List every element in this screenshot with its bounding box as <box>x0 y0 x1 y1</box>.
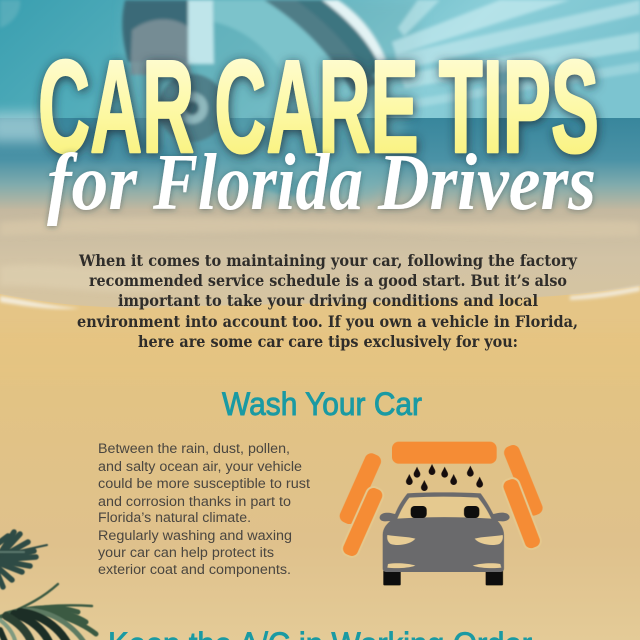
wash your car body text: Between the rain, dust, pollen, <box>98 441 290 456</box>
car wheels <box>383 570 401 585</box>
wash your car body text: your car can help protect its <box>98 545 274 560</box>
windshield <box>397 497 491 519</box>
palm tree fronds <box>0 532 96 640</box>
intro paragraph: here are some car care tips exclusively for you: <box>138 332 518 351</box>
intro paragraph <box>77 251 578 351</box>
intro paragraph: environment into account too. If you own a vehicle in Florida, <box>77 312 578 331</box>
wash your car body text: Florida’s natural climate. <box>98 510 251 525</box>
bumper lights <box>387 563 415 568</box>
side wash brushes <box>338 443 545 559</box>
car seats <box>411 506 427 518</box>
upper frond <box>0 532 47 587</box>
wash your car body text: exterior coat and components. <box>98 562 291 577</box>
subtitle: for Florida Drivers: for <box>47 139 138 227</box>
intro paragraph: important to take your driving conditions and local <box>118 291 538 310</box>
icon: car wash <box>338 442 545 585</box>
subtitle: for Florida Drivers: Drivers <box>377 139 596 227</box>
car mirrors <box>380 513 397 521</box>
wash your car body text: and salty ocean air, your vehicle <box>98 459 302 474</box>
lower frond <box>0 584 96 640</box>
subtitle: for Florida Drivers: Florida <box>152 139 363 227</box>
subtitle: for Florida Drivers <box>47 139 596 227</box>
car body <box>383 492 504 572</box>
intro paragraph: recommended service schedule is a good start. But it’s also <box>89 271 567 290</box>
wash your car body text: could be more susceptible to rust <box>98 476 310 491</box>
wash your car body text: and corrosion thanks in part to <box>98 494 291 509</box>
headlights <box>387 535 415 545</box>
water drops <box>406 464 483 491</box>
heading: Wash Your Car: Wash Your Car <box>222 386 422 422</box>
wash your car body text <box>98 441 310 577</box>
wash your car body text: Regularly washing and waxing <box>98 528 292 543</box>
intro paragraph: When it comes to maintaining your car, following the factory <box>78 251 578 270</box>
top wash brush <box>392 442 497 464</box>
wheel photo behind title <box>0 0 640 200</box>
